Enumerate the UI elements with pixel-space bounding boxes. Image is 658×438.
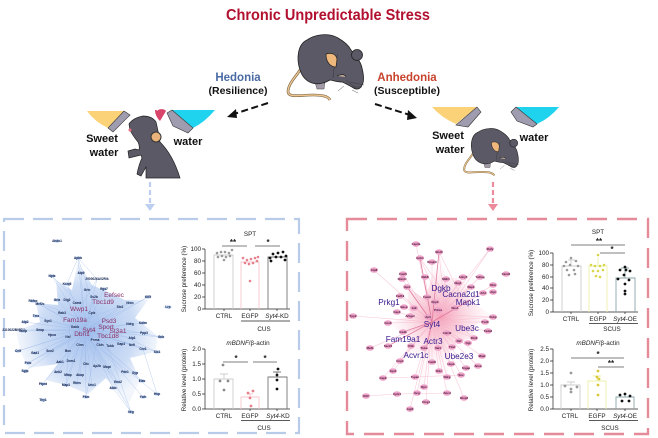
network hub labels: susceptible: Ube3c xyxy=(455,324,479,333)
network nodes: resilient: Stx1 xyxy=(117,305,124,309)
network nodes: resilient: Eno2 xyxy=(114,380,122,384)
network nodes: susceptible: Tada2 xyxy=(484,329,492,333)
network nodes: susceptible: Tspan xyxy=(411,375,419,379)
network nodes: resilient: Gad1 xyxy=(31,351,39,355)
network nodes: susceptible: Cdc42 xyxy=(443,331,452,335)
network nodes: susceptible: Gdi xyxy=(412,306,417,310)
network nodes: resilient: Grin xyxy=(84,288,90,292)
network nodes: resilient: Gria xyxy=(54,298,60,302)
chart: susceptible mBDNF: * xyxy=(596,350,600,359)
network hub labels: resilient: Sport xyxy=(98,324,114,331)
network nodes: susceptible: Fam5 xyxy=(399,272,407,276)
network nodes: susceptible: Mapt xyxy=(479,354,485,358)
network hub labels: susceptible: Fam19a1 xyxy=(386,335,421,344)
network hub labels: susceptible: Actr3 xyxy=(423,337,443,346)
network nodes: susceptible: Vat1 xyxy=(435,346,441,350)
network hub labels: resilient: Syt4 xyxy=(82,327,96,334)
network hub labels: resilient: Fam19a xyxy=(63,317,87,324)
network nodes: resilient: Map1 xyxy=(62,383,70,387)
network nodes: resilient: Snap xyxy=(36,328,44,332)
scene: hedonia bowls xyxy=(87,110,215,133)
chart: susceptible SPT: SCUS xyxy=(603,326,621,333)
network nodes: resilient: Mapt xyxy=(103,365,112,369)
network nodes: susceptible: Fam8 xyxy=(428,360,436,364)
arrow: to hedonia xyxy=(227,103,268,118)
network hub labels: resilient: Tbc1d9 xyxy=(92,299,114,306)
chart: resilient mBDNF: CTRL xyxy=(216,413,233,420)
dots xyxy=(216,249,287,282)
chart: susceptible mBDNF: SCUS xyxy=(601,425,619,432)
chart: susceptible SPT: ** xyxy=(596,237,603,246)
bars xyxy=(214,372,287,409)
chart: resilient SPT: CTRL xyxy=(216,313,233,320)
network nodes: susceptible: Tuba xyxy=(421,346,428,350)
network nodes: resilient: Ahdc1 xyxy=(52,239,62,243)
network nodes: resilient: Dnm1 xyxy=(67,359,76,363)
chart: resilient SPT: 20 xyxy=(194,294,201,301)
bars xyxy=(561,376,634,409)
network nodes: resilient: Atp1 xyxy=(128,336,136,340)
network nodes: resilient: Pkm xyxy=(83,395,90,399)
icon: standing mouse xyxy=(128,116,180,178)
network nodes: susceptible: Ywhag xyxy=(475,275,485,279)
chart: susceptible SPT: 40 xyxy=(542,285,549,292)
chart: susceptible SPT: Syt4-OE xyxy=(613,316,637,323)
network nodes: susceptible: Gpi1 xyxy=(390,369,397,373)
icon: hunched mouse xyxy=(464,128,519,176)
network nodes: susceptible: Dnajc3 xyxy=(427,260,437,264)
network nodes: resilient: Aldo xyxy=(109,386,117,390)
chart: resilient SPT: 80 xyxy=(194,258,201,265)
chart: susceptible mBDNF: 1.0 xyxy=(540,382,549,389)
network nodes: resilient: Rgs7 xyxy=(100,287,108,291)
chart: susceptible SPT: 60 xyxy=(542,274,549,281)
network nodes: resilient: Syn1 xyxy=(44,319,52,323)
label: hedonia sweet water: water xyxy=(89,147,119,159)
network hub labels: susceptible xyxy=(378,284,481,361)
network hub labels: resilient: Psd3 xyxy=(102,318,117,325)
network nodes: resilient: Akap xyxy=(76,373,84,377)
network nodes: susceptible: Atpi xyxy=(490,290,496,294)
network nodes: resilient: Slc1 xyxy=(154,350,161,354)
network nodes: resilient: Nrxn xyxy=(126,301,134,305)
chart: resilient SPT: CUS xyxy=(257,326,271,333)
network nodes: resilient: Atp9 xyxy=(77,271,85,275)
network nodes: susceptible: Arl3 xyxy=(480,291,486,295)
chart: resilient mBDNF: * xyxy=(234,354,238,363)
network nodes: susceptible: Cep3a xyxy=(412,242,421,246)
network nodes: susceptible: Rap1 xyxy=(467,285,475,289)
chart: susceptible mBDNF: 1.5 xyxy=(540,370,549,377)
network nodes: susceptible: Nsf xyxy=(457,339,461,343)
network nodes: susceptible: Fam3 xyxy=(423,295,431,299)
network: susceptible gene network xyxy=(349,241,511,412)
network hub labels: susceptible: Mapk1 xyxy=(456,298,481,307)
network nodes: susceptible: Ctsg1 xyxy=(422,400,430,404)
arrow: to anhedonia xyxy=(375,104,417,120)
network nodes: resilient: Mef2c xyxy=(35,302,45,306)
network nodes: resilient: Cbln xyxy=(96,343,104,347)
chart: susceptible mBDNF: 2.0 xyxy=(540,358,549,365)
network nodes: resilient: Cplx xyxy=(89,311,96,315)
network nodes: resilient xyxy=(2,239,172,414)
network nodes: susceptible: Tln2 xyxy=(449,345,455,349)
chart: resilient SPT xyxy=(181,231,290,333)
network hub labels: resilient: Eefsec xyxy=(104,292,125,299)
network nodes: susceptible: Dus1 xyxy=(451,306,459,310)
network nodes: susceptible: Cand1 xyxy=(502,272,511,276)
network nodes: resilient: Vamp xyxy=(19,329,27,333)
chart: susceptible SPT: SPT xyxy=(592,229,604,236)
chart: susceptible mBDNF: Syt4-OE xyxy=(613,413,637,420)
network hub labels: susceptible: Acvr1c xyxy=(403,351,429,360)
icon: central stressed mouse xyxy=(288,35,364,100)
label: Anhedonia: Anhedonia xyxy=(377,72,437,84)
network nodes: susceptible: Prkca xyxy=(434,308,442,312)
label: Hedonia: (Resilience) xyxy=(209,85,267,97)
chart: resilient mBDNF: 1.0 xyxy=(192,376,201,383)
network nodes: susceptible: Gcg xyxy=(414,391,420,395)
network nodes: susceptible: Ehd3 xyxy=(435,250,443,254)
network nodes: resilient: Kif5 xyxy=(145,295,151,299)
network nodes: resilient: Elav xyxy=(139,379,146,383)
network nodes: resilient: Gap4 xyxy=(117,342,125,346)
chart: resilient mBDNF: 0.5 xyxy=(192,391,201,398)
network nodes: susceptible: Rdx xyxy=(436,369,442,373)
label: hedonia sweet water: Sweet xyxy=(86,133,118,145)
network nodes: susceptible: Tpp2 xyxy=(350,314,357,318)
chart: susceptible SPT: CTRL xyxy=(563,316,580,323)
network nodes: resilient: Nefl xyxy=(129,343,135,347)
chart: resilient SPT: * xyxy=(266,238,270,247)
chart: susceptible mBDNF: 0.5 xyxy=(540,394,549,401)
network nodes: resilient: Tmx xyxy=(33,314,40,318)
label: Hedonia xyxy=(209,72,267,97)
chart: resilient SPT: Sucrose preference (%) xyxy=(181,246,188,312)
network nodes: resilient: Ap2b xyxy=(93,364,101,368)
network nodes: resilient: Nrg xyxy=(128,410,134,414)
network nodes: susceptible: Dnm1l xyxy=(398,277,407,281)
network nodes: susceptible: Ahsa xyxy=(474,364,482,368)
network nodes: susceptible: Adcy5 xyxy=(459,275,468,279)
bars xyxy=(214,255,287,309)
network nodes: resilient: Ndrg xyxy=(126,322,134,326)
network nodes: susceptible: Cox6 xyxy=(384,321,392,325)
scene: anhedonia bowls xyxy=(432,107,559,127)
network nodes: susceptible: Gnb1 xyxy=(416,256,424,260)
network nodes: resilient: Sgip xyxy=(22,369,29,373)
network nodes: resilient: Sv2b xyxy=(90,295,98,299)
network nodes: susceptible: Ap3 xyxy=(425,315,431,319)
network nodes: susceptible: Gpd xyxy=(404,285,410,289)
network nodes: susceptible: Atp8 xyxy=(371,268,378,272)
chart: susceptible SPT xyxy=(528,229,638,333)
network nodes: susceptible: Mdh1 xyxy=(442,277,450,281)
network nodes: susceptible: Gsdk xyxy=(399,330,407,334)
network nodes: resilient: Gabb xyxy=(71,325,79,329)
label: hedonia sweet water xyxy=(86,133,119,159)
network nodes: resilient: Nsf xyxy=(65,335,72,339)
network nodes: resilient: Kalrn xyxy=(139,321,147,325)
network nodes: susceptible: Rab8 xyxy=(421,275,429,279)
network nodes: resilient: Syp xyxy=(132,371,138,375)
chart: susceptible mBDNF xyxy=(528,340,638,432)
network hub labels: susceptible: Ube2e3 xyxy=(445,352,474,361)
chart: resilient mBDNF: Syt4-KD xyxy=(266,413,290,420)
network nodes: susceptible: Cap2 xyxy=(379,376,387,380)
network nodes: susceptible: Mafb xyxy=(367,346,374,350)
network nodes: susceptible: Arhgef xyxy=(405,314,415,318)
dots xyxy=(563,254,631,295)
network nodes: resilient: Apbb xyxy=(74,256,82,260)
chart: susceptible SPT: Sucrose preference (%) xyxy=(528,250,535,316)
network nodes: susceptible: Abcd xyxy=(443,391,451,395)
network nodes: resilient: 2900026A02Rik xyxy=(85,277,109,281)
label: Anhedonia: (Susceptible) xyxy=(374,85,440,97)
network nodes: susceptible: Ndrg xyxy=(444,375,451,379)
network nodes: susceptible: Rufy xyxy=(487,247,494,251)
chart: resilient mBDNF: 0.0 xyxy=(192,406,201,413)
network nodes: susceptible: Dlat xyxy=(490,283,496,287)
network nodes: resilient: Tubb xyxy=(106,344,114,348)
chart: susceptible SPT: 0 xyxy=(545,309,549,316)
network nodes: resilient: Atp2 xyxy=(21,320,29,324)
network hub labels: resilient: St3a1 xyxy=(110,328,127,335)
network nodes: resilient: Nptx xyxy=(48,274,56,278)
chart: resilient SPT: 0 xyxy=(197,306,201,313)
label: Anhedonia xyxy=(374,72,440,97)
bars xyxy=(562,258,635,312)
network nodes: susceptible: Ogt xyxy=(466,341,471,345)
network nodes: resilient: Hsp xyxy=(154,392,160,396)
network nodes: resilient: Pclo xyxy=(25,361,31,365)
network hub labels: susceptible: Syt4 xyxy=(424,320,441,329)
chart: resilient mBDNF: mBDNF/β-actin xyxy=(226,340,270,347)
network nodes: resilient: Mtap xyxy=(64,373,72,377)
label: anhedonia sweet water xyxy=(432,130,465,156)
chart: susceptible SPT: * xyxy=(610,245,614,254)
network nodes: susceptible: Nsg1 xyxy=(454,281,462,285)
chart: resilient mBDNF: CUS xyxy=(257,425,271,432)
chart: resilient SPT: Syt4-KD xyxy=(265,313,289,320)
network nodes: susceptible: Rtn3 xyxy=(471,336,478,340)
network nodes: resilient: Lrp xyxy=(165,305,171,309)
network: resilient gene network xyxy=(2,239,172,414)
chart: susceptible mBDNF: EGFP xyxy=(588,413,606,420)
chart: susceptible mBDNF: 0.0 xyxy=(540,406,549,413)
network nodes: susceptible: Cnp1 xyxy=(396,359,404,363)
network nodes: susceptible xyxy=(349,241,511,412)
chart: susceptible mBDNF: mBDNF/β-actin xyxy=(576,340,620,347)
network nodes: resilient: Cnr1 xyxy=(139,347,147,351)
chart: resilient mBDNF xyxy=(181,340,290,432)
network nodes: resilient: Dlg2 xyxy=(64,298,71,302)
chart: susceptible mBDNF: Relative level (protein) xyxy=(528,349,535,411)
label: hedonia water: water xyxy=(173,136,203,148)
chart: resilient SPT: ** xyxy=(230,238,237,247)
network nodes: resilient: Aak1 xyxy=(56,360,64,364)
network hub labels: resilient xyxy=(63,292,127,340)
network nodes: susceptible: Sec24 xyxy=(384,344,393,348)
panel: resilient frame xyxy=(4,219,299,433)
network nodes: susceptible: Basp xyxy=(400,305,408,309)
icon: heart xyxy=(155,109,166,121)
chart: resilient mBDNF: * xyxy=(263,354,267,363)
network nodes: resilient: Thy1 xyxy=(39,398,47,402)
network nodes: susceptible: Otop2 xyxy=(460,396,469,400)
chart: susceptible SPT: 20 xyxy=(542,297,549,304)
label: anhedonia water: water xyxy=(519,132,549,144)
arrow: down to susceptible panel xyxy=(488,182,498,211)
network nodes: resilient: Ptprd xyxy=(39,382,47,386)
network nodes: resilient: Ctnn xyxy=(76,343,84,347)
chart: resilient SPT: 40 xyxy=(194,282,201,289)
chart: susceptible mBDNF: 2.5 xyxy=(540,346,549,353)
network nodes: resilient: Bsn xyxy=(65,349,71,353)
network nodes: resilient: Kcnj6 xyxy=(63,282,72,286)
network nodes: resilient: Rims xyxy=(73,381,81,385)
network nodes: resilient: Gnb xyxy=(158,335,164,339)
network nodes: susceptible: Agt2 xyxy=(407,407,414,411)
chart: resilient SPT: EGFP xyxy=(241,313,259,320)
network nodes: susceptible: Srgap xyxy=(462,366,470,370)
label: anhedonia sweet water: water xyxy=(435,144,465,156)
chart: resilient mBDNF: 1.5 xyxy=(192,361,201,368)
network nodes: resilient: Scn2 xyxy=(46,349,54,353)
network nodes: susceptible: Cplx1 xyxy=(393,392,401,396)
chart: resilient SPT: 100 xyxy=(190,246,201,253)
network hub labels: resilient: Dbn1 xyxy=(74,331,90,338)
network hub labels: resilient: Wwp1 xyxy=(70,306,88,313)
network nodes: susceptible: Kif2 xyxy=(363,394,369,398)
label: Hedonia: Hedonia xyxy=(215,72,261,84)
dots xyxy=(564,370,631,402)
chart: susceptible mBDNF: ** xyxy=(608,359,615,368)
network nodes: resilient: Pnma xyxy=(91,338,100,342)
network hub labels: susceptible: Dgkb xyxy=(431,284,451,293)
chart: resilient SPT: SPT xyxy=(244,231,256,238)
arrow: down to resilient panel xyxy=(145,182,155,211)
network hub labels: susceptible: Prkg1 xyxy=(378,298,400,307)
chart: susceptible SPT: 80 xyxy=(542,262,549,269)
chart: susceptible mBDNF: CTRL xyxy=(562,413,579,420)
chart: susceptible SPT: EGFP xyxy=(589,316,607,323)
network nodes: resilient: Pde1 xyxy=(121,370,129,374)
label: anhedonia sweet water: Sweet xyxy=(432,130,464,142)
network nodes: resilient: Ywh xyxy=(140,395,146,399)
chart: resilient SPT: 60 xyxy=(194,270,201,277)
chart: resilient mBDNF: EGFP xyxy=(241,413,259,420)
network nodes: susceptible: Cwf19 xyxy=(396,294,405,298)
network nodes: susceptible: Psd3 xyxy=(482,320,489,324)
chart: susceptible SPT: 100 xyxy=(538,250,549,257)
network nodes: resilient: Hpca xyxy=(48,333,56,337)
network nodes: resilient: Unc1 xyxy=(88,383,96,387)
network nodes: susceptible: Ppp3 xyxy=(431,300,439,304)
network nodes: resilient: Cltc xyxy=(83,362,89,366)
network nodes: susceptible: Hspa xyxy=(447,362,455,366)
network nodes: resilient: Rab3 xyxy=(58,311,66,315)
chart: resilient mBDNF: 2.0 xyxy=(192,346,201,353)
network hub labels: resilient: Tbc1d8 xyxy=(97,333,119,340)
title: Chronic Unpredictable Stress xyxy=(226,7,430,24)
network nodes: susceptible: Cap1 xyxy=(393,310,401,314)
network hub labels: susceptible: Cacna2d1 xyxy=(442,290,480,299)
network nodes: susceptible: Pebp xyxy=(489,315,497,319)
chart: resilient mBDNF: Relative level (protein) xyxy=(181,349,188,411)
network nodes: susceptible: Pdk xyxy=(408,344,414,348)
network nodes: resilient: Rbfox xyxy=(28,299,38,303)
network nodes: resilient: Ppp3 xyxy=(140,331,148,335)
network nodes: resilient: Ank2 xyxy=(54,370,62,374)
network nodes: susceptible: Rp1 xyxy=(421,385,427,389)
network nodes: resilient: Camk xyxy=(73,301,82,305)
panel: susceptible frame xyxy=(347,219,648,434)
dots xyxy=(219,364,279,407)
network nodes: susceptible: Snx xyxy=(458,373,464,377)
network nodes: resilient: 2310022B05Rik xyxy=(2,328,26,332)
network nodes: resilient: Celf xyxy=(15,349,22,353)
